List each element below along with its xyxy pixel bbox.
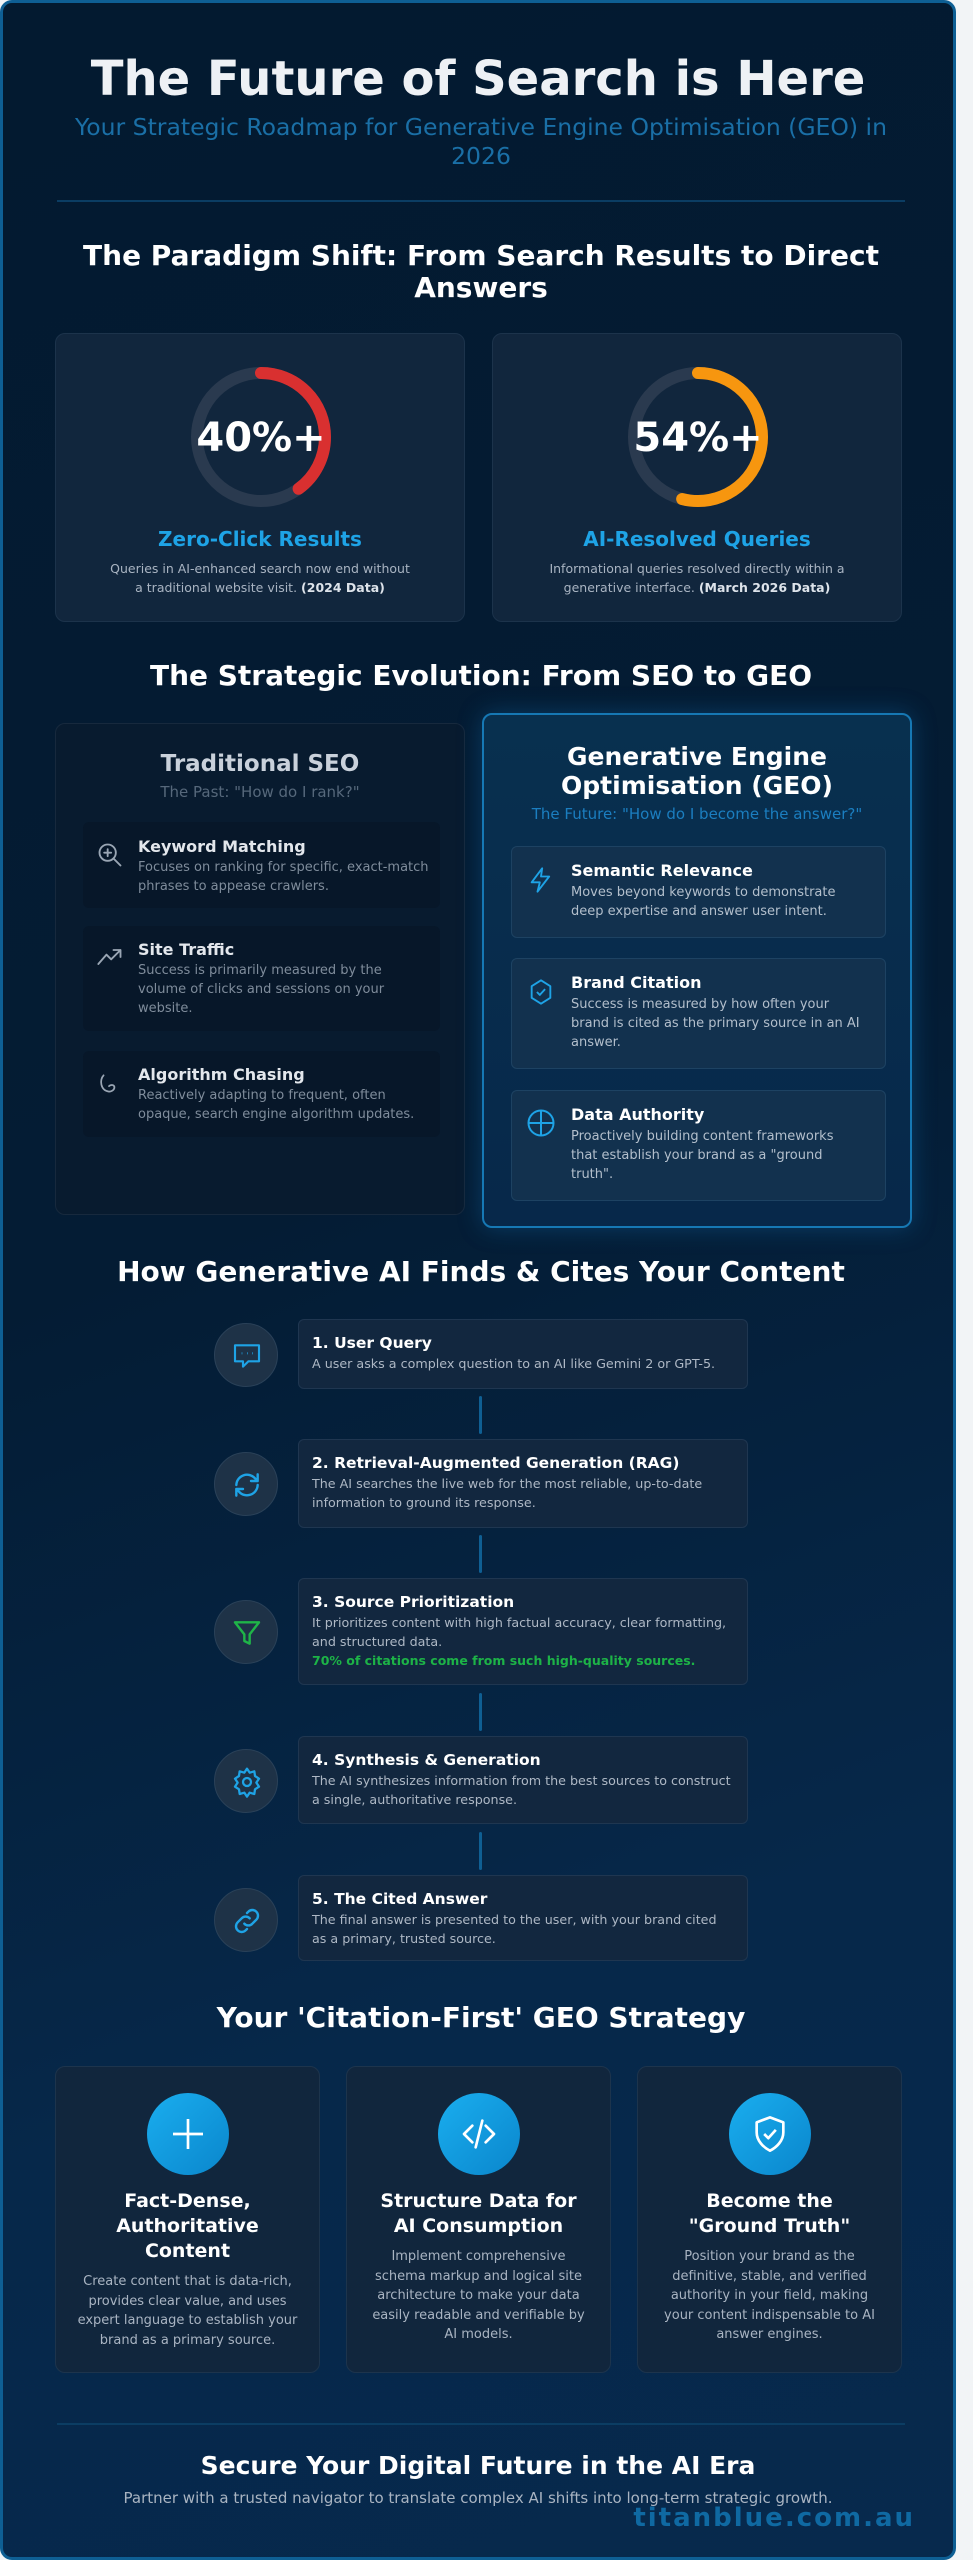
icon: badge check [530, 979, 552, 1005]
step 4: 4. Synthesis & Generation [312, 1751, 541, 1769]
item: semantic relevance [511, 846, 886, 938]
step 5: 5. The Cited Answer [312, 1890, 487, 1908]
step 1: 1. User Query [312, 1334, 432, 1352]
heading: citation-first strategy: Your 'Citation-First' GEO Strategy [217, 2001, 745, 2034]
panel: ground truth [637, 2066, 902, 2373]
step 3: It prioritizes content with high factual accuracy, clear formatting, and structured data. [312, 1615, 726, 1649]
brand url: titanblue.com.au [633, 2503, 915, 2533]
chart: donut 54%: 54%+ [633, 415, 763, 461]
item: algorithm chasing: Reactively adapting to frequent, often opaque, search engine algorithm updates. [138, 1088, 414, 1122]
item: data authority [511, 1090, 886, 1201]
label: AI-Resolved Queries [583, 527, 811, 551]
footer text: Partner with a trusted navigator to translate complex AI shifts into long-term strategic growth. [124, 2489, 832, 2507]
icon: refresh [214, 1452, 278, 1516]
panel: structure data: Implement comprehensive [391, 2249, 566, 2264]
icon: plus [147, 2093, 229, 2175]
icon: rotate [100, 1074, 116, 1092]
step 5: The final answer is presented to the user, with your brand cited as a primary, trusted source. [312, 1912, 717, 1946]
step 4: The AI synthesizes information from the best sources to construct a single, authoritative response. [312, 1773, 731, 1807]
chart: donut 40% [191, 367, 331, 507]
title: The Future of Search is Here [91, 51, 865, 107]
item: keyword matching: Keyword Matching [138, 837, 306, 856]
subheading: The Past: "How do I rank?" [160, 783, 360, 801]
footer heading: Secure Your Digital Future in the AI Era [201, 2451, 755, 2480]
heading: Optimisation (GEO) [561, 771, 833, 800]
step 1 [214, 1319, 748, 1389]
icon: code [438, 2093, 520, 2175]
item: brand citation: Brand Citation [571, 973, 701, 992]
step 3: 3. Source Prioritization [312, 1593, 514, 1611]
item: algorithm chasing [83, 1051, 440, 1137]
item: site traffic [83, 926, 440, 1031]
icon: globe cross [528, 1110, 554, 1136]
subtitle: Your Strategic Roadmap for Generative Engine Optimisation (GEO) in 2026 [75, 113, 887, 170]
item: site traffic: Success is primarily measured by the volume of clicks and sessions on your website. [138, 963, 384, 1016]
step 4 [214, 1736, 748, 1824]
icon: gear [214, 1749, 278, 1813]
item: semantic relevance: Moves beyond keywords to demonstrate deep expertise and answer user intent. [571, 885, 835, 919]
panel: fact-dense content [55, 2066, 320, 2373]
panel: fact-dense content: Fact-Dense, [124, 2190, 251, 2212]
label: Zero-Click Results [158, 527, 362, 551]
icon: magnifier plus [98, 844, 122, 866]
panel: zero-click stat [55, 333, 465, 622]
panel: traditional SEO [55, 723, 465, 1215]
panel: structure data: Structure Data for [380, 2190, 577, 2212]
item: data authority: Proactively building content frameworks that establish your brand as a "ground truth". [571, 1129, 833, 1182]
item: algorithm chasing: Algorithm Chasing [138, 1065, 305, 1084]
heading: Traditional SEO [161, 751, 359, 777]
heading [561, 742, 833, 800]
step 2: 2. Retrieval-Augmented Generation (RAG) [312, 1454, 679, 1472]
item: keyword matching: Focuses on ranking for specific, exact-match phrases to appease crawlers. [138, 860, 429, 894]
panel: structure data: AI Consumption [394, 2215, 563, 2237]
item: brand citation: Success is measured by how often your brand is cited as the primary source in an AI answer. [571, 997, 860, 1050]
icon: trend up [97, 949, 122, 965]
step 2: The AI searches the live web for the most reliable, up-to-date information to ground its response. [312, 1476, 702, 1510]
heading: Generative Engine [567, 742, 827, 771]
panel: fact-dense content: Content [145, 2240, 230, 2262]
item: brand citation [511, 958, 886, 1069]
panel: fact-dense content: Create content that is data-rich, provides clear value, and uses expert language to establish your brand as a primary source. [78, 2274, 297, 2348]
chart: donut 54% [628, 367, 768, 507]
chart: donut 40%: 40%+ [196, 415, 326, 461]
item: keyword matching [83, 822, 440, 908]
icon: link [214, 1888, 278, 1952]
icon: funnel [214, 1600, 278, 1664]
item: data authority: Data Authority [571, 1105, 704, 1124]
step 5 [214, 1875, 748, 1961]
description: Queries in AI-enhanced search now end without a traditional website visit. (2024 Data) [110, 561, 410, 595]
icon: lightning [530, 867, 550, 893]
panel: ground truth: Position your brand as the definitive, stable, and verified authority in your field, making your content indispensable to AI answer engines. [664, 2249, 875, 2342]
panel: structure data [346, 2066, 611, 2373]
panel: fact-dense content: Authoritative [116, 2215, 259, 2237]
heading: paradigm shift: The Paradigm Shift: From Search Results to Direct Answers [83, 239, 879, 304]
step 3 [214, 1578, 748, 1685]
subheading: The Future: "How do I become the answer?" [532, 805, 862, 823]
icon: shield check [729, 2093, 811, 2175]
panel: AI-resolved stat [492, 333, 902, 622]
step 2 [214, 1439, 748, 1528]
panel: ground truth: Become the [706, 2190, 833, 2212]
heading: how AI finds content: How Generative AI Finds & Cites Your Content [117, 1255, 845, 1288]
panel: ground truth: "Ground Truth" [689, 2215, 850, 2237]
panel: structure data: schema markup and logical site architecture to make your data easily readable and verifiable by AI models. [372, 2268, 585, 2342]
panel: GEO [482, 713, 912, 1228]
description: Informational queries resolved directly within a generative interface. (March 2026 Data) [549, 561, 845, 595]
step 3: 70% of citations come from such high-quality sources. [312, 1653, 695, 1668]
item: site traffic: Site Traffic [138, 940, 234, 959]
item: semantic relevance: Semantic Relevance [571, 861, 753, 880]
heading: strategic evolution: The Strategic Evolution: From SEO to GEO [150, 659, 812, 692]
icon: chat [214, 1323, 278, 1387]
step 1: A user asks a complex question to an AI like Gemini 2 or GPT-5. [312, 1356, 715, 1371]
